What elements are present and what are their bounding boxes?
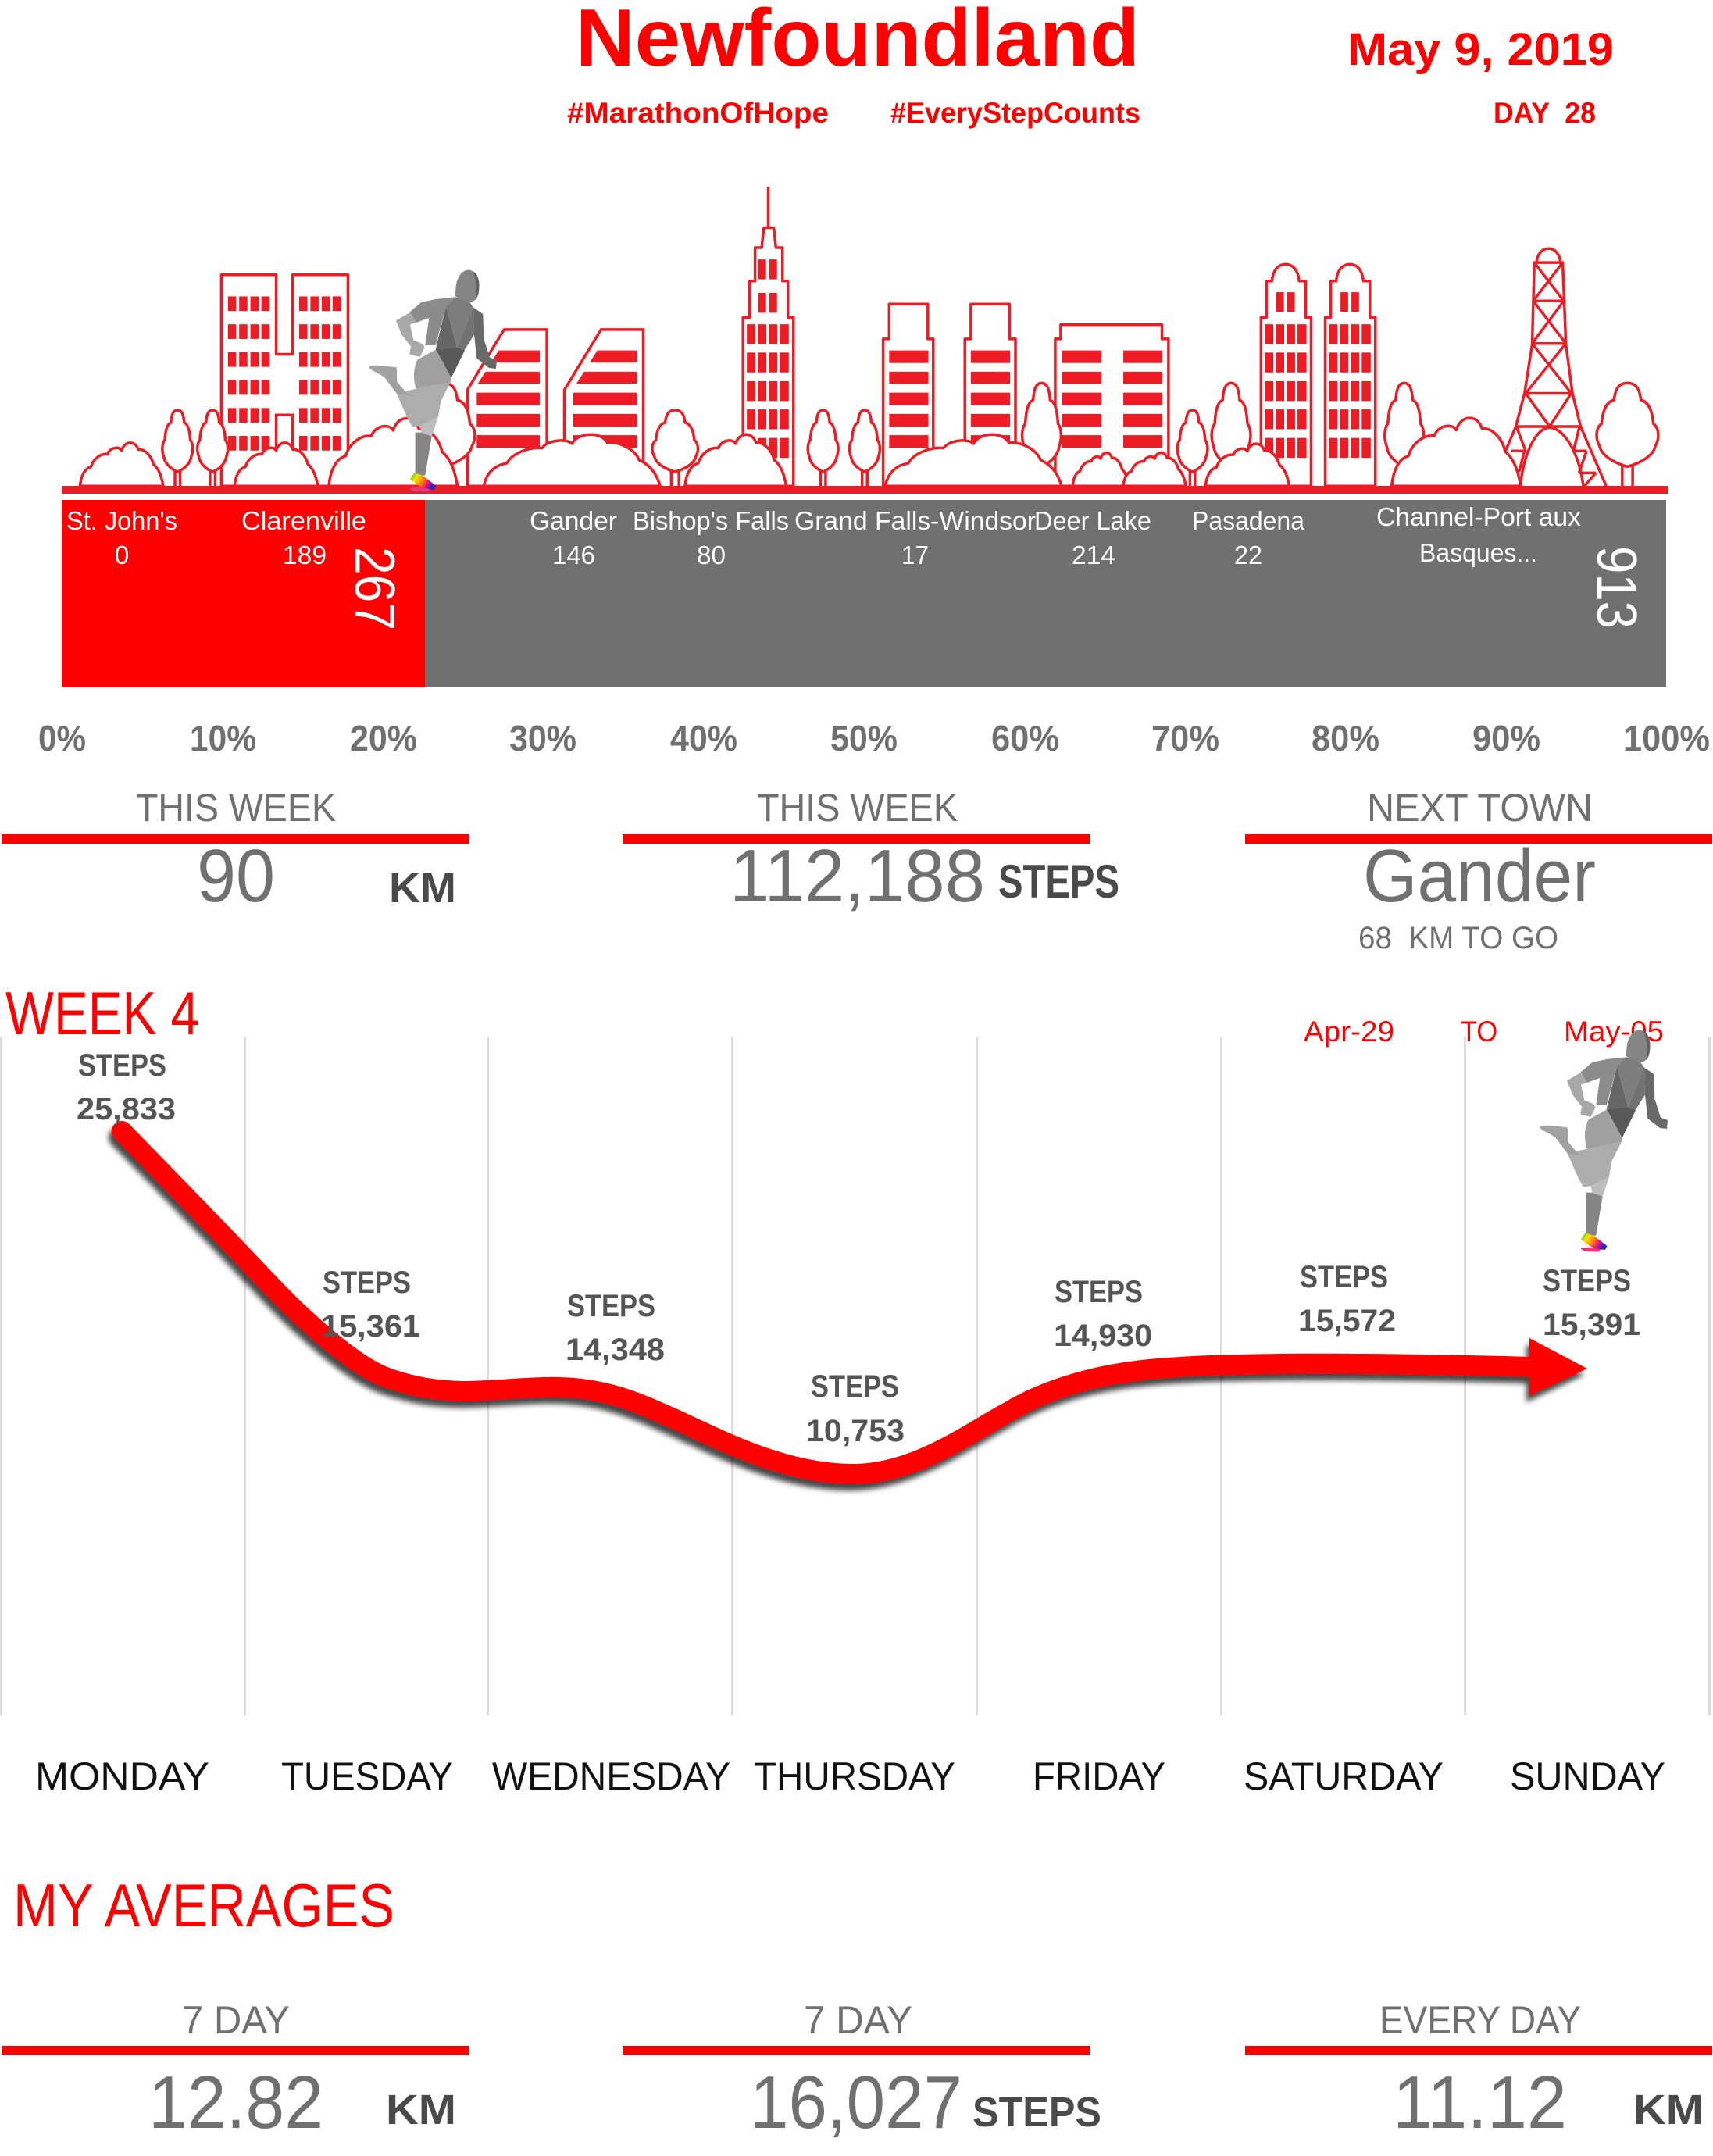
- skyline illustration: [62, 187, 1668, 494]
- steps: Wednesday: STEPS: [567, 1289, 655, 1323]
- steps: Monday: [77, 1048, 176, 1126]
- weekday labels: SATURDAY: [1244, 1754, 1444, 1798]
- steps: Tuesday: [321, 1265, 420, 1344]
- day counter: DAY 28: [1494, 97, 1596, 129]
- weekday labels: FRIDAY: [1033, 1754, 1165, 1798]
- steps: Friday: STEPS: [1055, 1275, 1143, 1309]
- hashtag: marathon of hope: #MarathonOfHope: [567, 97, 829, 129]
- km done: 267: [343, 547, 405, 630]
- weekday labels: SUNDAY: [1510, 1754, 1665, 1798]
- town: Gander: Gander: [530, 506, 617, 535]
- steps: Thursday: STEPS: [811, 1369, 899, 1404]
- town: St. John's: [66, 506, 177, 569]
- average: 7 day steps: 7 DAY: [804, 1998, 912, 2042]
- stat: next town: NEXT TOWN: [1367, 786, 1593, 830]
- km remaining: 913: [1585, 546, 1647, 629]
- steps: Sunday: 15,391: [1543, 1308, 1640, 1342]
- town: Bishop's Falls: [633, 506, 789, 569]
- weekday labels: TUESDAY: [281, 1754, 453, 1798]
- average: 7 day km: [2, 1998, 469, 2144]
- steps: Tuesday: 15,361: [321, 1309, 420, 1344]
- weekday labels: MONDAY: [35, 1754, 209, 1798]
- town: Clarenville: [241, 506, 366, 569]
- steps: Sunday: [1543, 1264, 1640, 1342]
- percent axis: 70%: [1151, 718, 1219, 759]
- stat: weekly km: [2, 786, 469, 918]
- town: Pasadena: Pasadena: [1192, 506, 1305, 535]
- town: Channel-Port aux Basques: Basques...: [1419, 538, 1537, 567]
- percent axis: 80%: [1312, 718, 1379, 759]
- week date range: Apr-29: [1304, 1016, 1394, 1048]
- steps: Wednesday: 14,348: [566, 1333, 665, 1367]
- percent axis: 30%: [509, 718, 576, 759]
- stat: next town: Gander: [1363, 834, 1596, 918]
- average: 7 day steps: STEPS: [972, 2089, 1101, 2136]
- average: 7 day km: 7 DAY: [182, 1998, 290, 2042]
- ground line: [62, 486, 1668, 494]
- steps: Saturday: STEPS: [1300, 1260, 1388, 1294]
- stat: weekly steps: [623, 786, 1119, 918]
- stat: weekly steps: STEPS: [998, 855, 1119, 908]
- average: 7 day km: 12.82: [148, 2061, 323, 2144]
- average: every day km: 11.12: [1393, 2061, 1567, 2144]
- town: Grand Falls-Windsor: [794, 506, 1036, 569]
- percent axis: 50%: [830, 718, 898, 759]
- weekday labels: THURSDAY: [754, 1754, 955, 1798]
- week heading: WEEK 4: [5, 979, 199, 1048]
- weekday labels: WEDNESDAY: [492, 1754, 730, 1798]
- town: St. John's: 0: [115, 541, 129, 569]
- town: Deer Lake: Deer Lake: [1034, 506, 1151, 535]
- week date range: TO: [1461, 1016, 1497, 1048]
- steps: Saturday: 15,572: [1298, 1304, 1396, 1338]
- town: Bishop's Falls: 80: [697, 541, 726, 569]
- steps: Friday: 14,930: [1054, 1319, 1152, 1353]
- town: St. John's: St. John's: [66, 506, 177, 535]
- week date range: May-05: [1564, 1016, 1664, 1048]
- remaining segment: [425, 500, 1666, 687]
- town: Gander: 146: [552, 541, 595, 569]
- averages heading: MY AVERAGES: [13, 1871, 394, 1940]
- town: Channel-Port aux Basques: [1376, 502, 1581, 567]
- weekday labels: [35, 1754, 1665, 1798]
- town: Pasadena: 22: [1234, 541, 1262, 569]
- percent axis: [38, 718, 1710, 759]
- date: May 9, 2019: [1347, 24, 1614, 75]
- stat: weekly km: KM: [389, 865, 456, 912]
- town: Deer Lake: 214: [1072, 541, 1115, 569]
- average: 7 day steps: [623, 1998, 1101, 2144]
- steps: Friday: [1054, 1275, 1152, 1353]
- town: Grand Falls-Windsor: 17: [901, 541, 929, 569]
- town: Clarenville: Clarenville: [241, 506, 366, 535]
- percent axis: 0%: [38, 718, 86, 759]
- steps trend arrow: [122, 1131, 1587, 1474]
- stat: next town: [1245, 786, 1712, 955]
- hashtag: every step counts: #EveryStepCounts: [890, 97, 1140, 129]
- average: 7 day km: KM: [386, 2086, 456, 2133]
- steps: Thursday: 10,753: [806, 1414, 905, 1448]
- town: Grand Falls-Windsor: Grand Falls-Windsor: [794, 506, 1036, 535]
- runner on skyline: [369, 270, 497, 492]
- steps: Sunday: STEPS: [1543, 1264, 1631, 1298]
- progress bar: [62, 500, 1666, 687]
- stat: weekly steps: 112,188: [730, 834, 985, 918]
- average: every day km: KM: [1633, 2086, 1704, 2133]
- stat: weekly km: THIS WEEK: [136, 786, 336, 830]
- town: Clarenville: 189: [283, 541, 327, 569]
- week date range: [1304, 1016, 1664, 1048]
- percent axis: 10%: [190, 718, 256, 759]
- steps: Monday: 25,833: [77, 1092, 176, 1126]
- percent axis: 90%: [1472, 718, 1540, 759]
- steps: Thursday: [806, 1369, 905, 1448]
- town: Bishop's Falls: Bishop's Falls: [633, 506, 789, 535]
- percent axis: 100%: [1623, 718, 1710, 759]
- completed segment: [62, 500, 425, 687]
- average: 7 day steps: 16,027: [750, 2061, 962, 2144]
- stat: weekly km: 90: [197, 834, 275, 918]
- average: every day km: EVERY DAY: [1379, 1998, 1581, 2042]
- percent axis: 20%: [350, 718, 417, 759]
- percent axis: 60%: [991, 718, 1059, 759]
- steps: Wednesday: [566, 1289, 665, 1367]
- steps: Tuesday: STEPS: [323, 1265, 411, 1300]
- runner on chart: [1540, 1030, 1668, 1252]
- steps: Monday: STEPS: [78, 1048, 166, 1083]
- stat: next town: 68 KM TO GO: [1358, 921, 1558, 955]
- town: Gander: [530, 506, 617, 569]
- percent axis: 40%: [670, 718, 737, 759]
- town: Pasadena: [1192, 506, 1305, 569]
- stat: weekly steps: THIS WEEK: [757, 786, 958, 830]
- steps: Saturday: [1298, 1260, 1396, 1338]
- town: Deer Lake: [1034, 506, 1151, 569]
- average: every day km: [1245, 1998, 1712, 2144]
- town: Channel-Port aux Basques: Channel-Port aux: [1376, 502, 1581, 531]
